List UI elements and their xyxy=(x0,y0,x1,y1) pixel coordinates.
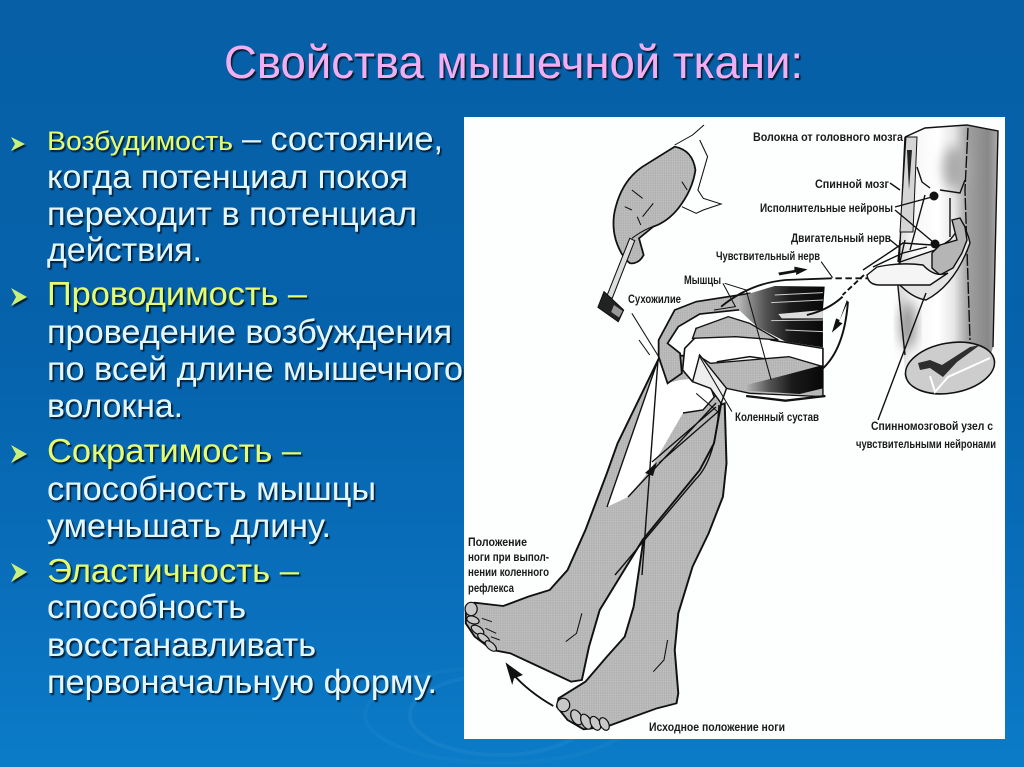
nerve root tube xyxy=(867,264,948,285)
definition: contractility xyxy=(47,470,376,544)
toes: back foot xyxy=(557,698,611,732)
term: contractility: Сократимость – xyxy=(47,432,302,469)
labels: Спинной мозг xyxy=(815,177,889,191)
definition: elasticity xyxy=(47,588,437,700)
labels: Спинномозговой узел с xyxy=(871,419,993,433)
labels: Положение xyxy=(468,535,527,549)
panel: knee reflex illustration xyxy=(464,117,1005,739)
neurons xyxy=(929,191,938,200)
thigh, tendon and knee joint xyxy=(659,293,823,403)
bullet: conductivity xyxy=(11,275,463,424)
labels: рефлекса xyxy=(468,581,514,595)
bullet: elasticity xyxy=(11,552,437,700)
bullet: contractility xyxy=(11,432,376,544)
definition: conductivity: проведение возбуждения xyxy=(47,313,452,350)
icon: arrow bullet xyxy=(11,563,27,582)
labels: Двигательный нерв xyxy=(791,231,891,245)
labels: ноги при выпол- xyxy=(468,550,549,564)
labels: Исполнительные нейроны xyxy=(760,201,893,215)
bullet list: muscle tissue properties xyxy=(11,120,463,700)
bullet: excitability xyxy=(11,120,443,268)
labels: Исходное положение ноги xyxy=(649,720,785,734)
definition: contractility: способность мышцы xyxy=(47,470,376,507)
icon: arrow bullet xyxy=(11,445,27,463)
icon: reflex hammer xyxy=(598,238,635,322)
posterior horn ganglion xyxy=(932,218,967,275)
definition: conductivity: волокна. xyxy=(47,387,183,424)
arrow: leg movement xyxy=(505,662,553,706)
knee-side white wedge and nerve branches xyxy=(607,360,720,575)
labels: Сухожилие xyxy=(628,292,681,306)
labels: Коленный сустав xyxy=(735,410,819,424)
arrow: sensory signal xyxy=(778,267,808,275)
definition: elasticity: способность xyxy=(47,588,246,625)
term: excitability: Возбудимость xyxy=(47,126,233,156)
title: Свойства мышечной ткани: xyxy=(224,36,803,88)
cord cross-section xyxy=(901,336,999,400)
definition: excitability xyxy=(47,120,443,268)
definition: conductivity: по всей длине мышечного xyxy=(47,350,463,387)
descending tract xyxy=(900,137,917,232)
term: elasticity: Эластичность – xyxy=(47,552,300,589)
toes: raised foot xyxy=(465,602,498,653)
diagram drawing xyxy=(465,125,999,732)
definition: contractility: уменьшать длину. xyxy=(47,507,331,544)
definition: excitability: когда потенциал покоя xyxy=(47,158,408,195)
definition: elasticity: первоначальную форму. xyxy=(47,663,437,700)
labels: Волокна от головного мозга xyxy=(753,130,903,144)
spinal cord segment xyxy=(863,125,999,420)
definition: excitability: действия. xyxy=(47,231,202,268)
shin: back leg and raised leg xyxy=(465,355,726,732)
muscles xyxy=(739,286,825,401)
labels: Мышцы xyxy=(684,273,721,287)
nerve sheath xyxy=(898,225,970,300)
nerves xyxy=(632,262,868,412)
icon: arrow bullet xyxy=(11,288,27,306)
arrow: motor signal xyxy=(832,300,848,333)
definition: conductivity xyxy=(47,313,463,424)
term: conductivity: Проводимость – xyxy=(47,275,308,312)
labels xyxy=(468,130,996,734)
labels: нении коленного xyxy=(468,565,549,579)
definition: excitability: – состояние, xyxy=(242,120,443,157)
definition: excitability: переходит в потенциал xyxy=(47,195,417,232)
icon: doctor's hand with sleeve xyxy=(613,125,721,263)
definition: elasticity: восстанавливать xyxy=(47,626,316,663)
icon: arrow bullet xyxy=(11,137,25,151)
labels: Чувствительный нерв xyxy=(716,249,820,263)
